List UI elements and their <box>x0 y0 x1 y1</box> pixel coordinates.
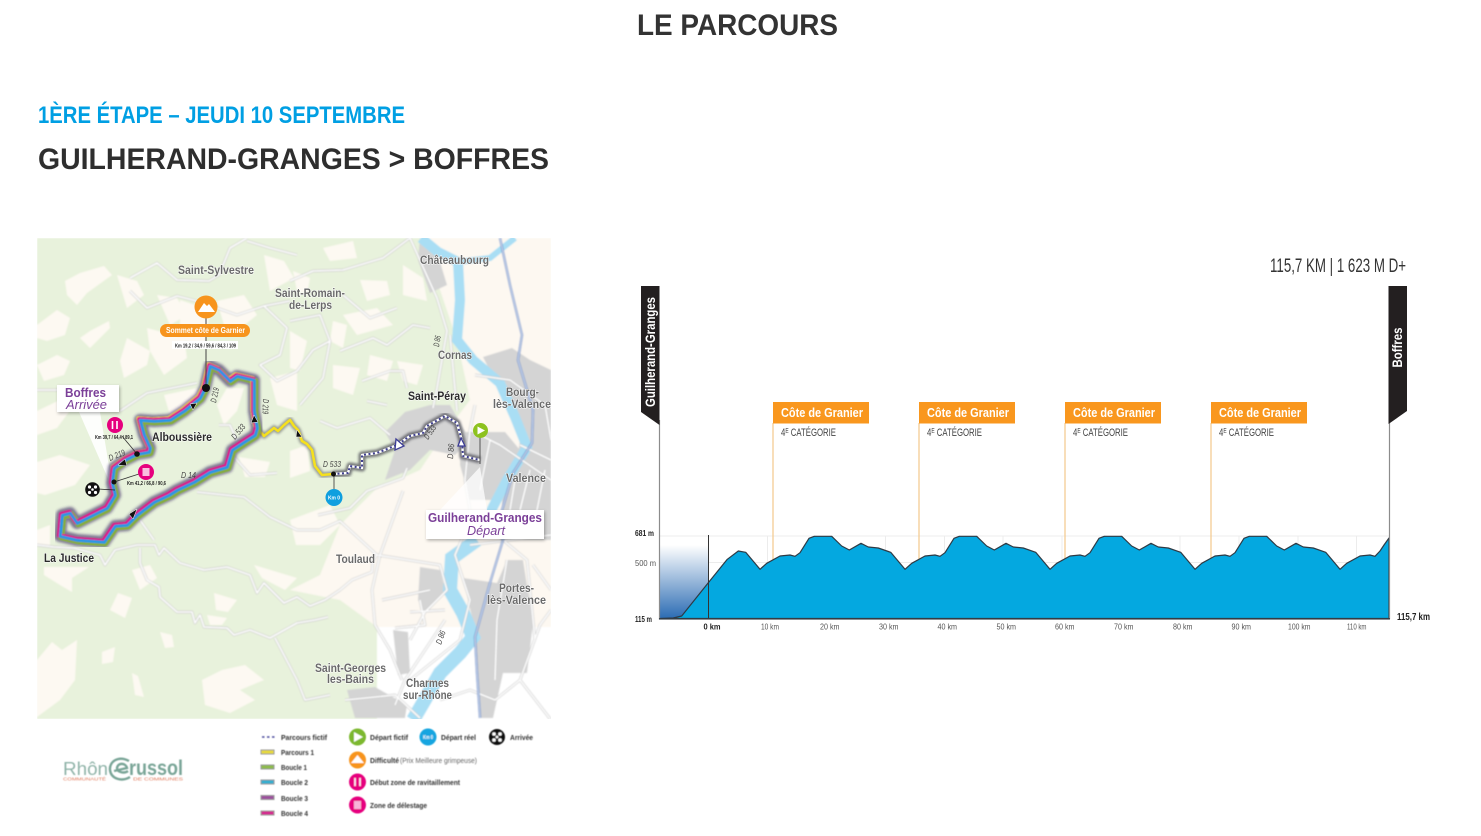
distance axis labels: 110 km <box>1347 622 1367 632</box>
chart: elevation profile <box>635 286 1430 632</box>
climb label 3: Côte de Granier <box>1073 405 1155 420</box>
climb label 1: E <box>785 428 789 435</box>
marker: km 0: Km 0 <box>328 496 340 502</box>
legend: line styles: Boucle 2 <box>281 778 308 787</box>
place names <box>44 255 551 702</box>
legend: line styles <box>261 733 327 818</box>
callout: Boffres arrivée: Boffres <box>65 385 106 400</box>
climb label 1 <box>773 402 869 439</box>
legend: line styles: Parcours 1 <box>281 748 314 757</box>
road labels: D 533 <box>421 423 438 441</box>
stage subtitle: 1ÈRE ÉTAPE – JEUDI 10 SEPTEMBRE <box>38 101 405 129</box>
finish flag <box>1388 286 1407 424</box>
legend: markers: (Prix Meilleure grimpeuse) <box>400 756 477 765</box>
place names: La Justice <box>44 553 94 565</box>
start flag <box>641 286 660 425</box>
climb label 2 <box>919 402 1015 439</box>
logo: RhônCrussol: COMMUNAUTÉ <box>63 776 106 782</box>
place names: Bourg- <box>506 387 539 399</box>
km 0 line <box>708 535 710 619</box>
legend: markers: Départ fictif <box>370 733 408 742</box>
axis lines <box>660 420 1390 619</box>
place names: Saint-Péray <box>408 391 467 403</box>
climb label 2: Côte de Granier <box>927 405 1009 420</box>
legend: markers: Zone de délestage <box>370 801 427 810</box>
logo: RhônCrussol: russol <box>129 757 183 780</box>
marker: finish <box>85 482 115 497</box>
place names: Valence <box>506 473 546 485</box>
route: fictive dotted start <box>333 416 480 474</box>
climb label 4: 4 <box>1219 427 1225 439</box>
distance axis labels: 90 km <box>1232 622 1251 632</box>
place names: lès-Valence <box>487 595 546 607</box>
distance axis labels: 80 km <box>1173 622 1193 632</box>
legend: line styles: Boucle 1 <box>281 763 307 772</box>
road labels: D 86 <box>433 629 448 646</box>
road labels: D 14 <box>181 470 196 480</box>
legend: line styles: Boucle 3 <box>281 794 308 803</box>
finish flag: Boffres <box>1390 328 1405 368</box>
legend <box>261 728 533 818</box>
marker: waste zone: Km 41,2 / 66,8 / 90,6 <box>127 481 166 487</box>
route: yellow connection <box>257 420 333 475</box>
place names: Toulaud <box>336 554 375 566</box>
place names: Saint-Romain- <box>275 288 345 300</box>
legend: markers: Départ réel <box>441 733 476 742</box>
distance axis labels: 70 km <box>1114 622 1134 632</box>
marker: summit climb: Km 19,2 / 34,9 / 59,6 / 84,3 / 109 <box>175 344 236 350</box>
distance axis labels: 50 km <box>996 622 1016 632</box>
road labels: D 533 <box>323 459 341 469</box>
climb label 4: E <box>1223 428 1227 435</box>
climb label 1: 4 <box>781 427 787 439</box>
logo: RhônCrussol <box>63 757 183 782</box>
callout: Boffres arrivée: Arrivée <box>65 397 107 412</box>
distance axis labels: 100 km <box>1288 622 1311 632</box>
distance axis labels: 40 km <box>938 622 957 632</box>
climb label 4 <box>1211 402 1307 439</box>
legend: markers: Arrivée <box>510 733 533 742</box>
place names: Châteaubourg <box>420 255 489 267</box>
marker: waste zone <box>112 464 166 487</box>
place names: les-Bains <box>327 674 374 686</box>
climb label 1: Côte de Granier <box>781 405 863 420</box>
climb label 2: CATÉGORIE <box>935 426 982 439</box>
legend: markers <box>349 728 533 814</box>
climb leader lines <box>773 423 1211 560</box>
distance axis labels: 20 km <box>820 622 840 632</box>
road labels: D 86 <box>431 335 443 347</box>
road labels <box>107 335 456 646</box>
marker: feed zone <box>95 417 140 457</box>
marker: fictive start <box>473 423 488 464</box>
elevation labels: 500 m <box>635 559 656 568</box>
place names: Saint-Sylvestre <box>178 265 254 277</box>
logo: RhônCrussol: Rhôn <box>63 759 108 779</box>
road labels: D 219 <box>107 447 127 463</box>
title: LE PARCOURS <box>637 9 838 42</box>
callout: Guilherand-Granges départ: Guilherand-Granges <box>428 510 542 525</box>
elevation labels <box>635 529 656 624</box>
elevation labels: 115 m <box>635 615 652 624</box>
place names: lès-Valence <box>493 399 551 411</box>
climb label 2: 4 <box>927 427 933 439</box>
climb label 1: CATÉGORIE <box>789 426 836 439</box>
road labels: D 86 <box>445 443 456 459</box>
climb label 2: E <box>931 428 935 435</box>
start flag: Guilherand-Granges <box>643 297 658 407</box>
climb label 3: 4 <box>1073 427 1079 439</box>
climb label 3: CATÉGORIE <box>1081 426 1128 439</box>
pre-start neutral gradient <box>660 545 708 619</box>
climb label 3 <box>1065 402 1161 439</box>
callout: Guilherand-Granges départ <box>426 467 544 539</box>
route direction arrows <box>118 403 302 519</box>
marker: summit climb <box>160 296 250 392</box>
panel: route map <box>37 238 551 720</box>
distance axis labels: 30 km <box>879 622 899 632</box>
elevation labels: 681 m <box>635 529 654 538</box>
place names: Cornas <box>438 350 472 362</box>
climb label 4: CATÉGORIE <box>1227 426 1274 439</box>
distance axis labels: 60 km <box>1055 622 1075 632</box>
legend: line styles: Boucle 4 <box>281 809 309 818</box>
legend: markers: Difficulté <box>370 756 399 765</box>
distance axis labels: 10 km <box>761 622 779 632</box>
logo: RhônCrussol: DE COMMUNES <box>133 776 183 782</box>
legend: markers: Km 0 <box>423 735 433 741</box>
marker: summit climb: Sommet côte de Garnier <box>166 326 245 335</box>
legend: markers: Début zone de ravitaillement <box>370 778 460 787</box>
place names: de-Lerps <box>289 300 332 312</box>
place names: Saint-Georges <box>315 663 386 675</box>
climb label 4: Côte de Granier <box>1219 405 1301 420</box>
distance and climbing summary: 115,7 KM | 1 623 M D+ <box>1270 256 1406 277</box>
place names: sur-Rhône <box>403 690 452 702</box>
place names: Portes- <box>499 583 534 595</box>
callout: Guilherand-Granges départ: Départ <box>467 523 506 538</box>
road labels: D 219 <box>260 399 271 414</box>
distance axis labels: 0 km <box>704 622 720 632</box>
road labels: D 219 <box>208 386 221 403</box>
climb label 3: E <box>1077 428 1081 435</box>
route direction arrows: fictive <box>395 438 465 450</box>
marker: feed zone: Km 39,7 / 64,4 / 89,1 <box>95 435 133 441</box>
place names: Charmes <box>406 678 449 690</box>
road labels: D 533 <box>229 422 248 441</box>
marker: km 0 <box>326 472 342 506</box>
callout: Boffres arrivée <box>57 385 119 490</box>
elevation area <box>660 536 1389 618</box>
stage route heading: GUILHERAND-GRANGES > BOFFRES <box>38 143 549 176</box>
place names: Alboussière <box>152 432 212 444</box>
route: race loops <box>59 365 258 543</box>
distance axis labels <box>704 622 1367 632</box>
baseline <box>659 618 1390 620</box>
chart grid <box>660 536 1389 618</box>
total distance label: 115,7 km <box>1397 612 1430 623</box>
legend: line styles: Parcours fictif <box>281 733 327 742</box>
